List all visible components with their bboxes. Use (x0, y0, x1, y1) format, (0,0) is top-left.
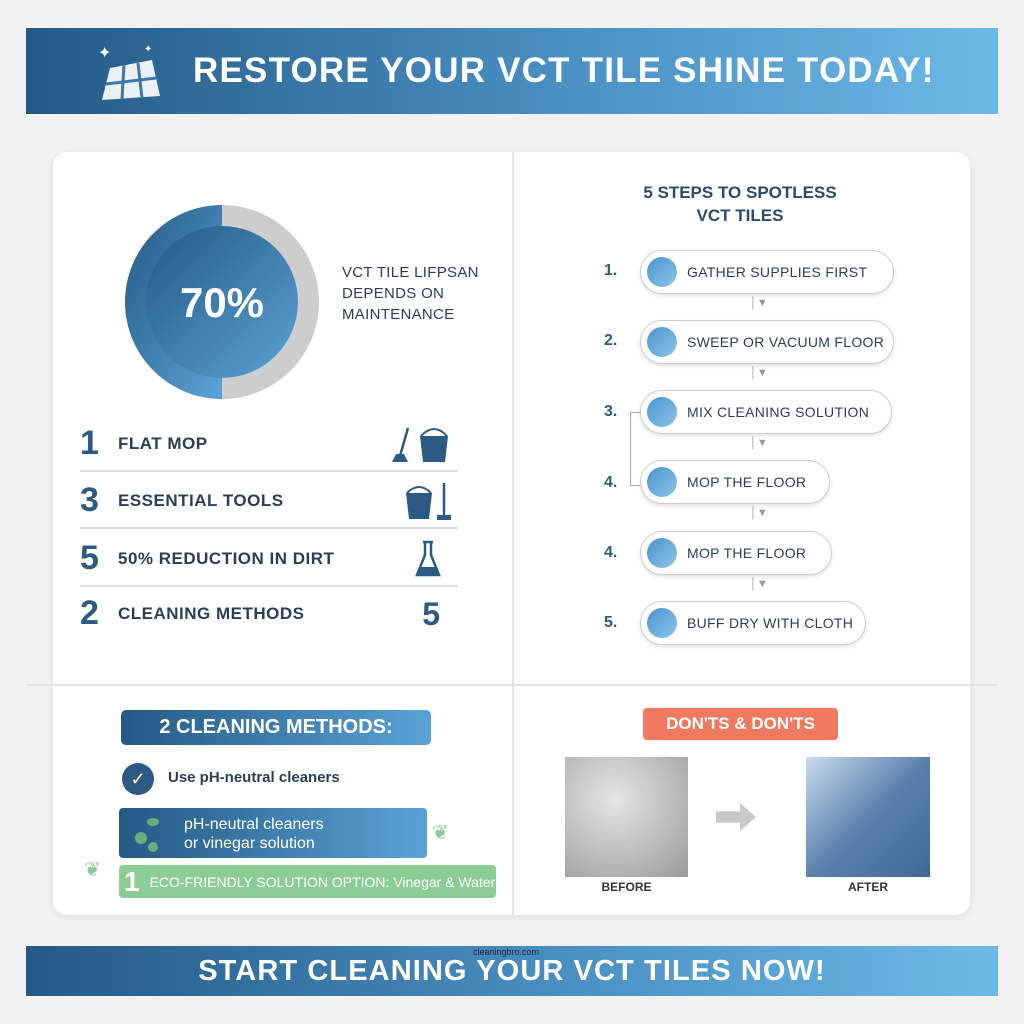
text: 4. (604, 474, 617, 491)
panel: cleaning methods: Use pH-neutral cleaners (168, 769, 340, 786)
stat rows: 1 (80, 424, 99, 462)
icon: leaves (135, 818, 159, 852)
header banner (26, 28, 998, 114)
donut label: DEPENDS ON (342, 285, 444, 302)
icon: flask (415, 540, 441, 576)
panel: stats: 50% REDUCTION IN DIRT (118, 549, 334, 568)
donts heading: DON'TS & DON'TS (666, 714, 815, 733)
text: │▼ (750, 578, 768, 590)
donut label: MAINTENANCE (342, 306, 454, 323)
text: │▼ (750, 367, 768, 379)
icon: tiles: ✦ (144, 44, 152, 55)
panel: stats: 3 (80, 481, 99, 519)
text: MIX CLEANING SOLUTION (687, 404, 869, 420)
green callout: 1 ECO-FRIENDLY SOLUTION OPTION: Vinegar & Water (124, 866, 495, 897)
text: MOP THE FLOOR (687, 545, 806, 561)
panel: before after (565, 708, 930, 894)
icon: mop and bucket (392, 428, 448, 462)
check item: ✓ (130, 769, 146, 789)
text: SWEEP OR VACUUM FLOOR (687, 334, 884, 350)
panel: stats: 5 (422, 596, 440, 632)
donts heading (643, 708, 838, 740)
donut chart (125, 205, 319, 399)
panel: cleaning methods (84, 710, 496, 898)
donut label (342, 264, 479, 323)
text: 4. (604, 544, 617, 561)
text: MOP THE FLOOR (687, 474, 806, 490)
icon: bucket and mop (406, 483, 451, 520)
panel: before after: BEFORE (601, 880, 652, 894)
donut chart: 70% (180, 279, 264, 326)
blue callout: pH-neutral cleaners (184, 816, 324, 833)
text: GATHER SUPPLIES FIRST (687, 264, 867, 280)
panel: steps (643, 183, 837, 225)
blue callout: or vinegar solution (184, 835, 315, 852)
text: 2. (604, 332, 617, 349)
icon: tiles (98, 44, 160, 100)
main card (53, 152, 970, 915)
before image (565, 757, 688, 877)
text: │▼ (750, 297, 768, 309)
donut label: VCT TILE LIFPSAN (342, 264, 479, 281)
arrow (716, 803, 756, 831)
panel: stats: CLEANING METHODS (118, 604, 304, 623)
icon: tiles: ✦ (98, 45, 111, 62)
after image (806, 757, 930, 877)
blue callout (119, 808, 427, 858)
steps heading: 5 STEPS TO SPOTLESS (643, 183, 837, 202)
methods heading (121, 710, 431, 745)
text: 1. (604, 262, 617, 279)
panel: stats (80, 205, 479, 632)
panel: stats: 2 (80, 594, 99, 632)
footer banner (26, 946, 998, 996)
text: │▼ (750, 437, 768, 449)
text: 3. (604, 403, 617, 420)
steps heading: VCT TILES (697, 206, 783, 225)
panel: before after: AFTER (848, 880, 888, 894)
text: 5. (604, 614, 617, 631)
panel: cleaning methods: ❦ (84, 859, 101, 881)
methods heading: 2 CLEANING METHODS: (159, 716, 393, 738)
check item (122, 763, 154, 795)
steps heading (643, 183, 837, 225)
icon: outline leaves: ❦ (432, 822, 449, 844)
footer banner: cleaningbro.com (473, 947, 539, 957)
title: RESTORE YOUR VCT TILE SHINE TODAY! (193, 51, 935, 90)
panel: stats: ESSENTIAL TOOLS (118, 491, 284, 510)
panel: stats: 5 (80, 539, 99, 577)
stat rows: FLAT MOP (118, 434, 208, 453)
text: BUFF DRY WITH CLOTH (687, 615, 853, 631)
stat rows (80, 420, 458, 472)
footer text: START CLEANING YOUR VCT TILES NOW! (198, 955, 826, 987)
text: │▼ (750, 507, 768, 519)
